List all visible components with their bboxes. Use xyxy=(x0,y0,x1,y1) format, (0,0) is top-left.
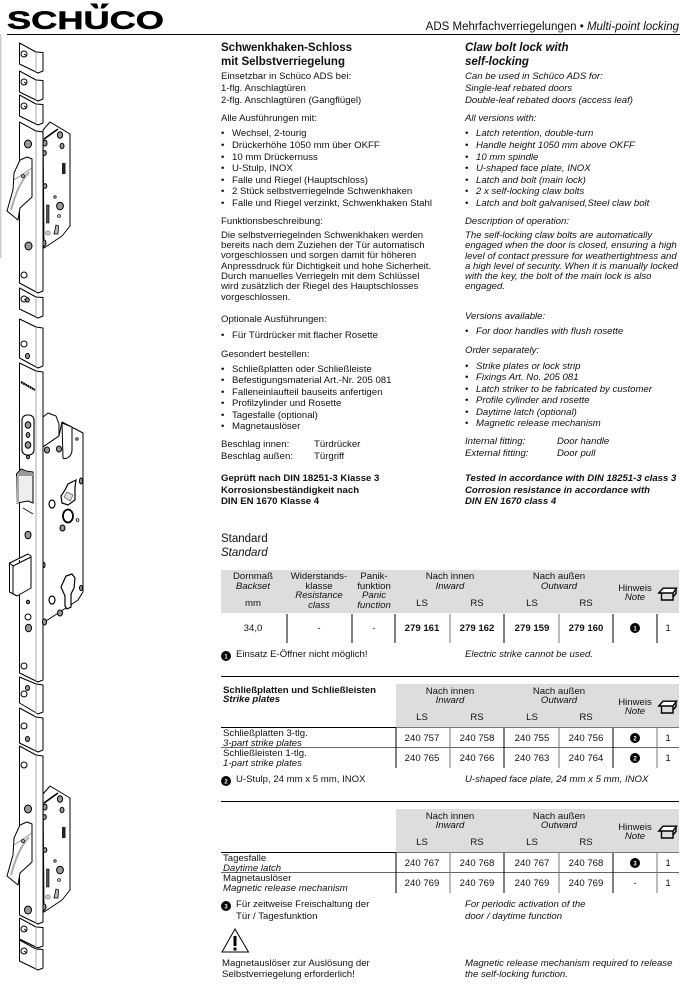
table rows: 240 769 xyxy=(405,878,439,889)
footnote 3 xyxy=(221,899,586,922)
German versions list: 10 mm Drückernuss xyxy=(232,152,318,163)
logo: Schüco: SCHÜCO xyxy=(7,6,164,35)
table rows xyxy=(221,727,679,769)
latch xyxy=(16,469,33,503)
table header: function xyxy=(357,600,391,611)
dead bolt xyxy=(10,554,31,596)
upper main plate xyxy=(20,122,43,293)
German order separately: Schließplatten oder Schließleiste xyxy=(232,364,372,375)
footnote 3: door / daytime function xyxy=(465,911,562,922)
table rows: 1 xyxy=(665,753,671,764)
English order separately: Profile cylinder and rosette xyxy=(476,395,590,406)
German function description: wird zusätzlich der Riegel des Hauptschlosses xyxy=(220,281,418,292)
German order separately: Tagesfalle (optional) xyxy=(232,410,318,421)
German order separately: Profilzylinder und Rosette xyxy=(232,398,341,409)
table header: Widerstands- xyxy=(291,571,347,582)
table rows: 1 xyxy=(665,878,671,889)
English versions list: • xyxy=(465,163,469,174)
table row: 1 xyxy=(633,626,637,632)
German order separately: • xyxy=(221,398,224,409)
table rows: Daytime latch xyxy=(223,863,281,874)
English operation description xyxy=(465,216,679,292)
footnote 3: Für zeitweise Freischaltung der xyxy=(236,899,370,910)
English order separately: • xyxy=(465,361,469,372)
table rows: Magnetauslöser xyxy=(223,873,292,884)
English versions available: Versions available: xyxy=(465,311,546,322)
table rows: Schließleisten 1-tlg. xyxy=(223,748,307,759)
English usage: Single-leaf rebated doors xyxy=(465,83,572,94)
German certification: DIN EN 1670 Klasse 4 xyxy=(221,496,320,507)
German certification: Geprüft nach DIN 18251-3 Klasse 3 xyxy=(221,473,379,484)
table header: funktion xyxy=(357,581,391,592)
English operation description: Description of operation: xyxy=(465,216,569,227)
German fittings: Türgriff xyxy=(314,451,345,462)
table header: Nach außen xyxy=(533,811,585,822)
German versions list: • xyxy=(221,140,224,151)
footnote 2: U-shaped face plate, 24 mm x 5 mm, INOX xyxy=(465,774,649,785)
footnote 3: 3 xyxy=(224,904,228,910)
warning note: Selbstverriegelung erforderlich! xyxy=(222,969,355,980)
warning note: Magnetic release mechanism required to release xyxy=(465,958,672,969)
English usage xyxy=(465,71,633,106)
English title: self-locking xyxy=(465,56,529,68)
table rows: 2 xyxy=(633,756,637,762)
English fittings: Internal fitting: xyxy=(465,436,526,447)
German order separately: Magnetauslöser xyxy=(232,421,301,432)
table rows: 1 xyxy=(665,733,671,744)
German usage xyxy=(221,71,361,106)
German order separately: Falleneinlaufteil bauseits anfertigen xyxy=(232,387,382,398)
table row: 279 159 xyxy=(515,623,549,634)
English versions list: 2 x self-locking claw bolts xyxy=(475,186,584,197)
table header xyxy=(221,570,679,613)
English versions list: • xyxy=(465,128,469,139)
English versions list: Handle height 1050 mm above OKFF xyxy=(476,140,636,151)
German versions list: • xyxy=(221,163,224,174)
English versions list: Latch and bolt galvanised,Steel claw bolt xyxy=(476,198,650,209)
warning note xyxy=(222,958,672,980)
German order separately: Befestigungsmaterial Art.-Nr. 205 081 xyxy=(232,375,391,386)
table header: Inward xyxy=(436,820,465,831)
English order separately: • xyxy=(465,395,469,406)
English versions list: • xyxy=(465,152,469,163)
footnote 1: 1 xyxy=(224,654,228,660)
section heading: Standard: Standard xyxy=(221,547,268,559)
table rows: 240 757 xyxy=(405,733,439,744)
English versions available: • xyxy=(465,326,469,337)
English operation description: a high level of security. When it is manually locked xyxy=(465,261,679,272)
table rows: Tagesfalle xyxy=(223,853,266,864)
table row xyxy=(244,614,671,643)
German function description: Anpressdruck für Dichtigkeit und hohe Sicherheit. xyxy=(221,261,431,272)
logo: Schüco xyxy=(7,3,164,35)
table header: RS xyxy=(579,598,593,609)
English versions available: For door handles with flush rosette xyxy=(476,326,623,337)
German order separately xyxy=(221,349,391,432)
German description column xyxy=(220,42,432,507)
table: strike plates xyxy=(221,684,679,786)
upper claw bolt xyxy=(7,157,32,220)
English operation description: level of contact pressure for weathertightness and xyxy=(465,251,677,262)
table rows: 240 765 xyxy=(405,753,439,764)
German certification: Korrosionsbeständigkeit nach xyxy=(221,485,359,496)
table rows: 240 766 xyxy=(460,753,494,764)
footnote 3: For periodic activation of the xyxy=(465,899,586,910)
English order separately: Daytime latch (optional) xyxy=(476,407,577,418)
English order separately: Magnetic release mechanism xyxy=(476,418,601,429)
table rows: Magnetic release mechanism xyxy=(223,883,348,894)
warning note: the self-locking function. xyxy=(465,969,568,980)
English order separately: Latch striker to be fabricated by customer xyxy=(476,384,653,395)
table header: Note xyxy=(625,706,645,717)
German order separately: • xyxy=(221,375,224,386)
English usage: Double-leaf rebated doors (access leaf) xyxy=(465,95,633,106)
table rows: 240 769 xyxy=(515,878,549,889)
German versions list: • xyxy=(221,152,224,163)
English certification: Corrosion resistance in accordance with xyxy=(465,485,650,496)
English order separately: Strike plates or lock strip xyxy=(476,361,581,372)
table header: Outward xyxy=(541,820,578,831)
German optional versions: Optionale Ausführungen: xyxy=(221,314,327,325)
German title xyxy=(221,42,352,68)
English versions list: Latch and bolt (main lock) xyxy=(476,175,586,186)
English fittings: Door pull xyxy=(557,448,596,459)
German function description: Die selbstverriegelnden Schwenkhaken werden xyxy=(221,230,423,241)
English certification: DIN EN 1670 class 4 xyxy=(465,496,557,507)
German fittings xyxy=(221,439,361,462)
table header: Hinweis xyxy=(618,697,652,708)
table header: Resistance xyxy=(295,590,343,601)
English versions list: • xyxy=(465,140,469,151)
German usage: 1-flg. Anschlagtüren xyxy=(221,83,306,94)
table rows: 240 769 xyxy=(569,878,603,889)
footnote 1: Einsatz E-Öffner nicht möglich! xyxy=(236,649,368,660)
footnote 2: 2 xyxy=(224,780,228,786)
English versions list: All versions with: xyxy=(464,113,537,124)
table rows: 240 755 xyxy=(515,733,549,744)
table header: Strike plates xyxy=(223,694,280,705)
footnote 3: Tür / Tagesfunktion xyxy=(236,911,317,922)
header category label: ADS Mehrfachverriegelungen • Multi-point locking xyxy=(426,21,680,33)
table header: Hinweis xyxy=(618,822,652,833)
central main plate xyxy=(20,363,46,682)
table rows: 1 xyxy=(665,858,671,869)
table row: 279 162 xyxy=(460,623,494,634)
English versions list: • xyxy=(465,198,469,209)
warning note: Magnetauslöser zur Auslösung der xyxy=(222,958,371,969)
table rows: 240 756 xyxy=(569,733,603,744)
table header: mm xyxy=(245,598,261,609)
section heading: Standard: Standard xyxy=(221,533,268,545)
table header: LS xyxy=(526,598,538,609)
German versions list: • xyxy=(221,128,224,139)
table header: Backset xyxy=(236,581,270,592)
German order separately: Gesondert bestellen: xyxy=(221,349,310,360)
German versions list: Wechsel, 2-tourig xyxy=(232,128,306,139)
German function description: vorgeschlossen und sorgen damit für höheren xyxy=(221,250,416,261)
German order separately: • xyxy=(221,364,224,375)
section heading: Standard xyxy=(221,533,268,559)
German versions list: Alle Ausführungen mit: xyxy=(221,113,317,124)
footnote 2 xyxy=(221,774,649,786)
table header: Dornmaß xyxy=(233,571,273,582)
German function description: Durch manuelles Verriegeln mit dem Schlüssel xyxy=(221,271,419,282)
English order separately xyxy=(465,345,653,429)
German versions list: • xyxy=(221,186,224,197)
table rows: Schließplatten 3-tlg. xyxy=(223,728,308,739)
table header: Nach innen xyxy=(426,686,474,697)
bottom plate segments xyxy=(20,918,43,970)
table header: Outward xyxy=(541,695,578,706)
English versions list xyxy=(464,113,650,209)
table header: Note xyxy=(625,592,645,603)
footnote 1 xyxy=(221,649,593,661)
lower main plate xyxy=(20,746,43,924)
German order separately: • xyxy=(221,410,224,421)
English usage: Can be used in Schüco ADS for: xyxy=(465,71,603,82)
English certification: Tested in accordance with DIN 18251-3 class 3 xyxy=(465,473,677,484)
table header: LS xyxy=(416,712,428,723)
German fittings: Beschlag außen: xyxy=(221,451,293,462)
table header: RS xyxy=(470,837,484,848)
English order separately: • xyxy=(465,407,469,418)
table rows: 240 769 xyxy=(460,878,494,889)
table rows: 1-part strike plates xyxy=(223,758,302,769)
table: standard locks xyxy=(221,570,679,661)
German title: Schwenkhaken-Schloss xyxy=(221,42,352,54)
table header: Note xyxy=(625,831,645,842)
icon: warning triangle xyxy=(222,929,248,952)
table row: 34,0 xyxy=(244,623,262,634)
German versions list: U-Stulp, INOX xyxy=(232,163,293,174)
German usage: 2-flg. Anschlagtüren (Gangflügel) xyxy=(221,95,361,106)
German function description xyxy=(220,216,431,303)
English versions list: • xyxy=(465,186,469,197)
upper hook lock case xyxy=(42,122,70,248)
German order separately: • xyxy=(221,421,224,432)
German function description: vorgeschlossen. xyxy=(221,292,290,303)
table header: RS xyxy=(579,837,593,848)
table header: class xyxy=(308,600,330,611)
English description column xyxy=(464,42,679,507)
German versions list: 2 Stück selbstverriegelnde Schwenkhaken xyxy=(232,186,412,197)
German optional versions: • xyxy=(221,330,224,341)
English order separately: • xyxy=(465,384,469,395)
table row: 279 161 xyxy=(405,623,440,634)
lower hook lock case xyxy=(42,786,70,912)
table header: RS xyxy=(579,712,593,723)
middle plate segments xyxy=(20,288,43,368)
English fittings: External fitting: xyxy=(465,448,529,459)
English order separately: • xyxy=(465,418,469,429)
English order separately: • xyxy=(465,372,469,383)
English operation description: engaged. xyxy=(465,281,505,292)
German versions list: • xyxy=(221,198,224,209)
table header xyxy=(223,684,679,727)
English operation description: with the key, the bolt of the main lock is also xyxy=(465,271,652,282)
table header: RS xyxy=(470,598,484,609)
German fittings: Beschlag innen: xyxy=(221,439,289,450)
English certification xyxy=(465,473,677,507)
table rows: 240 758 xyxy=(460,733,494,744)
table row: - xyxy=(317,623,321,634)
English order separately: Fixings Art. No. 205 081 xyxy=(476,372,579,383)
central lock case xyxy=(43,413,83,623)
table header: Schließplatten und Schließleisten xyxy=(223,685,376,696)
table header: Inward xyxy=(436,581,465,592)
table header: Inward xyxy=(436,695,465,706)
English fittings: Door handle xyxy=(557,436,609,447)
lower claw bolt xyxy=(7,822,32,885)
lower plate segments xyxy=(20,677,43,752)
table header: Outward xyxy=(541,581,578,592)
header rule xyxy=(7,34,680,35)
table header: RS xyxy=(470,712,484,723)
table header: LS xyxy=(416,837,428,848)
English operation description: engaged when the door is closed, ensuring a high xyxy=(465,240,677,251)
English versions list: • xyxy=(465,175,469,186)
table row: - xyxy=(372,623,376,634)
table rows: 240 768 xyxy=(460,858,494,869)
table header xyxy=(396,809,679,852)
English versions list: 10 mm spindle xyxy=(476,152,538,163)
table rows: 240 768 xyxy=(569,858,603,869)
German versions list: • xyxy=(221,175,224,186)
table rows: 3 xyxy=(633,862,637,868)
English versions available xyxy=(465,311,623,337)
German versions list xyxy=(221,113,432,209)
table rows: 240 767 xyxy=(405,858,439,869)
table rows: - xyxy=(633,878,637,889)
German function description: bereits nach dem Zuziehen der Tür automatisch xyxy=(221,240,425,251)
English versions list: Latch retention, double-turn xyxy=(476,128,593,139)
German versions list: Drückerhöhe 1050 mm über OKFF xyxy=(232,140,380,151)
table header: Hinweis xyxy=(618,583,652,594)
table rows: 240 767 xyxy=(515,858,549,869)
German versions list: Falle und Riegel verzinkt, Schwenkhaken Stahl xyxy=(232,198,432,209)
English title: Claw bolt lock with xyxy=(465,42,569,54)
footnote 2: U-Stulp, 24 mm x 5 mm, INOX xyxy=(236,774,366,785)
table header: LS xyxy=(416,598,428,609)
table row: 1 xyxy=(665,623,671,634)
table header: Nach außen xyxy=(533,686,585,697)
table header: Nach innen xyxy=(426,571,474,582)
table header: Panic xyxy=(362,590,386,601)
table header: LS xyxy=(526,837,538,848)
German optional versions: Für Türdrücker mit flacher Rosette xyxy=(232,330,378,341)
table rows: 2 xyxy=(633,736,637,742)
footnote 1: Electric strike cannot be used. xyxy=(465,649,593,660)
table rows xyxy=(221,852,679,894)
table: accessories xyxy=(221,809,679,922)
table rows: 240 763 xyxy=(515,753,549,764)
English fittings xyxy=(465,436,609,459)
English order separately: Order separately: xyxy=(465,345,539,356)
table row: 279 160 xyxy=(569,623,603,634)
table header: Nach innen xyxy=(426,811,474,822)
table header: klasse xyxy=(305,581,333,592)
table rows: 3-part strike plates xyxy=(223,738,302,749)
table header: Nach außen xyxy=(533,571,585,582)
German certification xyxy=(221,473,379,507)
German function description: Funktionsbeschreibung: xyxy=(221,216,323,227)
illustration: multi-point lock xyxy=(0,34,83,970)
English operation description: The self-locking claw bolts are automatically xyxy=(465,230,653,241)
table rows: 240 764 xyxy=(569,753,604,764)
table header: LS xyxy=(526,712,538,723)
German title: mit Selbstverriegelung xyxy=(221,56,345,68)
English versions list: U-shaped face plate, INOX xyxy=(476,163,591,174)
German optional versions xyxy=(221,314,378,341)
German fittings: Türdrücker xyxy=(314,439,361,450)
German order separately: • xyxy=(221,387,224,398)
German versions list: Falle und Riegel (Hauptschloss) xyxy=(232,175,368,186)
upper plate segments xyxy=(20,43,43,125)
English title xyxy=(465,42,569,68)
table header: Panik- xyxy=(360,571,388,582)
German usage: Einsetzbar in Schüco ADS bei: xyxy=(221,71,351,82)
